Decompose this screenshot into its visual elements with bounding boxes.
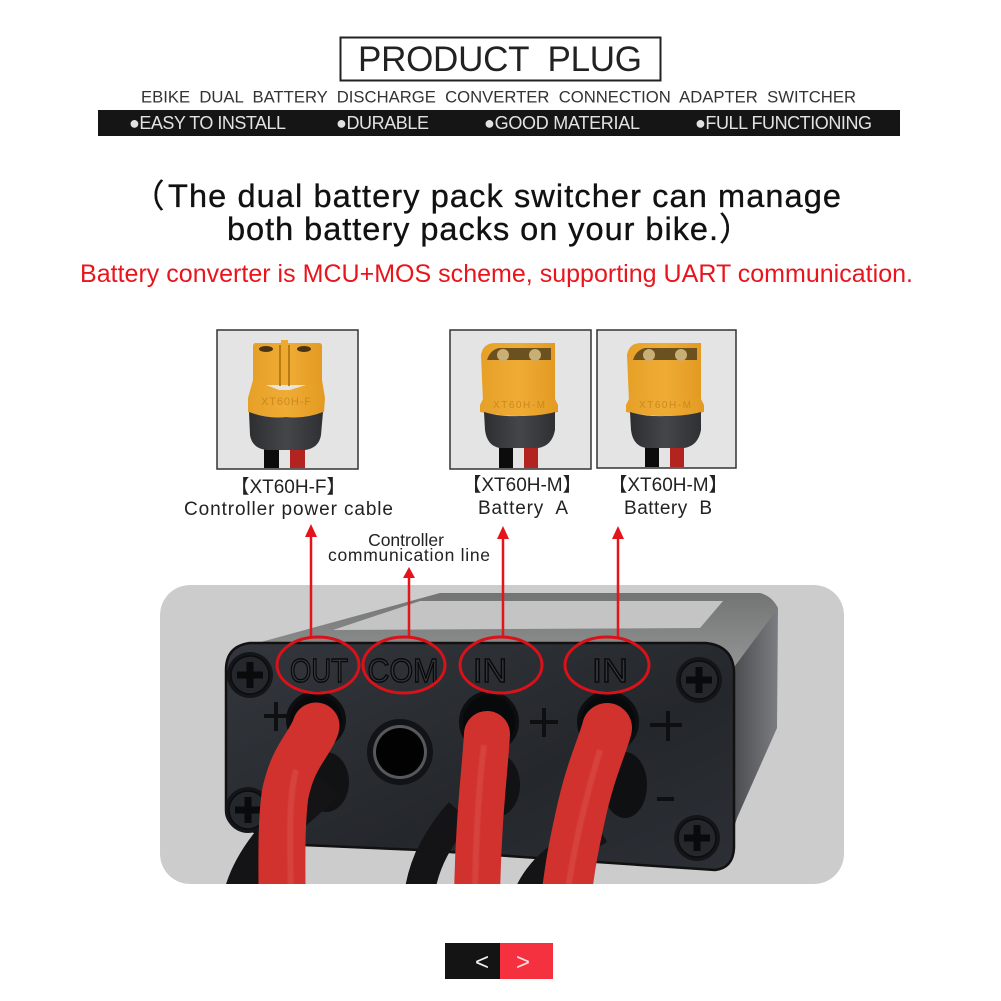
connector photo: XT60H-F: XT60H-F [261,396,311,408]
engraved port names: IN [473,652,507,689]
arrow: battery A [497,526,509,637]
plus and minus marks [264,702,682,799]
engraved port names: COM [368,652,438,689]
label: battery B [608,474,728,519]
subtitle: EBIKE DUAL BATTERY DISCHARGE CONVERTER CONNECTION ADAPTER SWITCHER [141,88,856,106]
black wires over face [240,752,647,890]
connector photo: XT60H-M battery B: XT60H-M [639,400,691,411]
connector photo: XT60H-M battery A [450,330,591,469]
navigation buttons: > [516,949,530,976]
device front face [226,643,734,870]
arrow: com [403,567,415,637]
label: controller power cable [184,476,393,520]
connector photo: XT60H-M battery A: XT60H-M [493,400,545,411]
label: battery A: 【XT60H-M】 [462,474,582,496]
heading: both battery packs on your bike. [227,211,718,247]
navigation buttons: < [475,949,489,976]
port holes [288,693,637,751]
connector photo: XT60H-M battery B [597,330,736,468]
heading: The dual battery pack switcher can manage [168,178,841,214]
arrow: battery B [612,526,624,638]
label: battery A: Battery A [478,498,568,519]
engraved port names: OUT [290,652,348,689]
label: battery B: 【XT60H-M】 [608,474,728,496]
label: controller power cable: Controller power cable [184,499,393,520]
label: communication line: communication line [328,545,490,565]
feature bar: ●FULL FUNCTIONING [695,113,872,133]
heading: ） [719,211,752,247]
heading [132,178,841,247]
feature bar: ●GOOD MATERIAL [484,113,640,133]
connector photo: XT60H-F [217,330,358,469]
arrow: out [305,524,317,637]
port highlight rings [277,637,649,693]
label: battery B: Battery B [624,498,712,519]
feature bar: ●EASY TO INSTALL [129,113,286,133]
label: communication line: Controller [368,530,444,550]
label: controller power cable: 【XT60H-F】 [230,476,346,498]
heading: （ [132,178,165,214]
engraved port names: IN [592,652,628,689]
panel: device photo [160,585,844,900]
device label plate [333,601,723,630]
device top face [250,593,778,672]
arrows [305,524,624,638]
navigation buttons [445,943,553,979]
wire highlights [290,745,600,890]
title box: PRODUCT PLUG [358,40,642,79]
engraved port names [290,658,626,683]
feature bar [98,110,900,136]
label: communication line [328,530,490,565]
black wires [226,833,535,884]
device right side [734,608,778,824]
red note: Battery converter is MCU+MOS scheme, supporting UART communication. [80,260,913,288]
red wires [282,726,607,900]
screws [225,652,722,861]
label: battery A [462,474,582,519]
feature bar: ●DURABLE [336,113,429,133]
COM socket [367,719,433,785]
